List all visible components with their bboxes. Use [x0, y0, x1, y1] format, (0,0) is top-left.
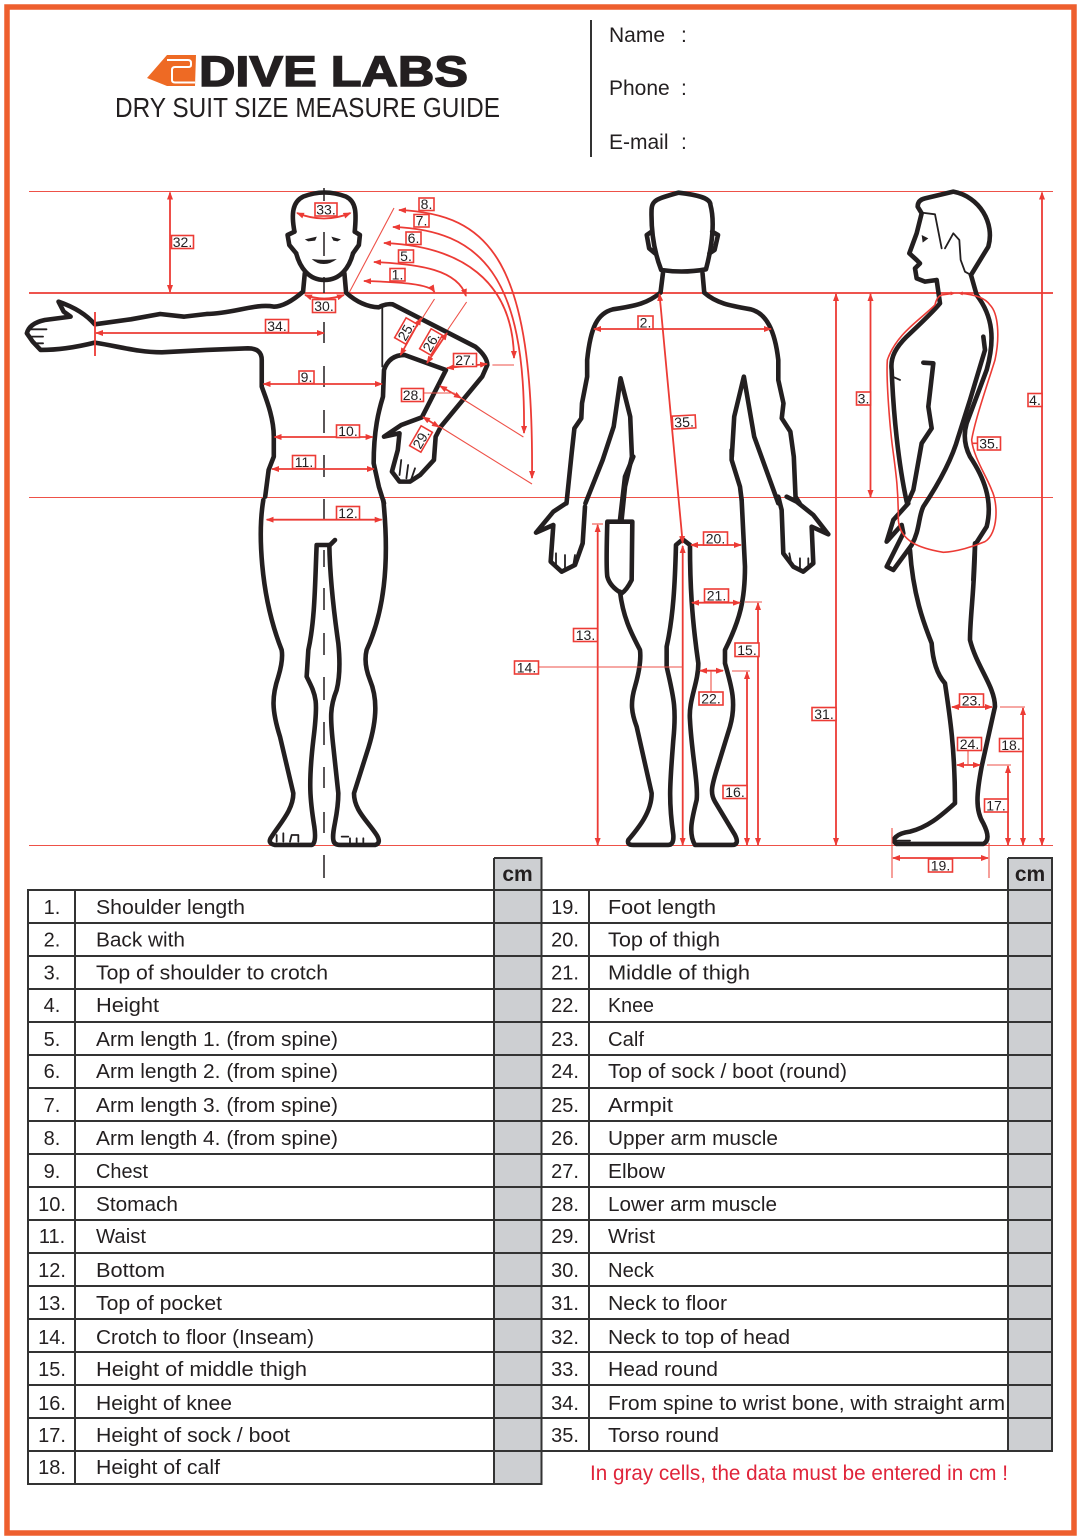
row 28: 28.	[551, 1194, 579, 1216]
table: measurements 19 to 35	[542, 858, 1052, 1451]
row 12	[38, 1260, 165, 1282]
row 23	[551, 1029, 644, 1051]
row 31: 31.	[551, 1293, 579, 1315]
row 23: Calf	[608, 1029, 644, 1051]
figure: front view	[27, 188, 487, 878]
row 11: Waist	[96, 1226, 146, 1248]
row 26: 26.	[551, 1128, 579, 1150]
face features	[305, 237, 341, 264]
row 20: Top of thigh	[608, 930, 720, 952]
field: name: :	[681, 24, 687, 47]
row 1	[44, 897, 245, 919]
row 1: Shoulder length	[96, 897, 245, 919]
row 5: 5.	[44, 1029, 60, 1051]
label 3: 3.	[858, 390, 869, 406]
row 33: 33.	[551, 1359, 579, 1381]
row 19: Foot length	[608, 897, 716, 919]
row 33	[551, 1359, 718, 1381]
row 8: Arm length 4. (from spine)	[96, 1128, 338, 1150]
label 20: 20.	[706, 530, 725, 546]
row 9	[44, 1161, 148, 1183]
label 24: 24.	[960, 736, 979, 752]
row 5: Arm length 1. (from spine)	[96, 1029, 338, 1051]
row 18: Height of calf	[96, 1457, 220, 1479]
row 35: Torso round	[608, 1425, 719, 1447]
row 21: 21.	[551, 962, 579, 984]
label 2: 2.	[640, 314, 651, 330]
row 13	[38, 1293, 222, 1315]
row 22: 22.	[551, 995, 579, 1017]
label 10: 10.	[338, 423, 358, 439]
row 11: 11.	[39, 1226, 65, 1248]
title: DRY SUIT SIZE MEASURE GUIDE	[115, 92, 500, 123]
label 32: 32.	[173, 234, 192, 250]
row 35	[551, 1425, 719, 1447]
row 1: 1.	[44, 897, 60, 919]
row 31	[551, 1293, 727, 1315]
row 8: 8.	[44, 1128, 60, 1150]
row 16: Height of knee	[96, 1393, 232, 1415]
row 32: Neck to top of head	[608, 1327, 790, 1349]
label 28: 28.	[403, 387, 422, 403]
row 22: Knee	[608, 995, 654, 1017]
row 25: Armpit	[608, 1095, 673, 1117]
row 22	[551, 995, 654, 1017]
row 19: 19.	[551, 897, 579, 919]
row 30: 30.	[551, 1260, 579, 1282]
label 14: 14.	[517, 660, 536, 676]
row 11	[39, 1226, 146, 1248]
label 31: 31.	[814, 706, 834, 722]
row 7: Arm length 3. (from spine)	[96, 1095, 338, 1117]
row 25	[551, 1095, 673, 1117]
row 21	[551, 962, 750, 984]
label 1: 1.	[392, 266, 403, 282]
row 7: 7.	[44, 1095, 60, 1117]
row 27	[551, 1161, 666, 1183]
row 27: 27.	[551, 1161, 579, 1183]
eye	[922, 235, 928, 243]
reference lines	[29, 192, 1053, 846]
header: contact fields	[591, 20, 687, 157]
row 25: 25.	[551, 1095, 579, 1117]
column header cm: cm	[1015, 863, 1045, 886]
row 30	[551, 1260, 655, 1282]
row 18: 18.	[38, 1457, 66, 1479]
row 3: Top of shoulder to crotch	[96, 962, 328, 984]
row 15: Height of middle thigh	[96, 1359, 307, 1381]
row 16	[38, 1393, 232, 1415]
row 28: Lower arm muscle	[608, 1194, 777, 1216]
row 20	[551, 930, 720, 952]
label 35 back: 35.	[674, 414, 694, 430]
label 25: 25.	[394, 319, 418, 343]
row 23: 23.	[551, 1029, 579, 1051]
figure: side view	[887, 192, 995, 844]
label 22: 22.	[701, 690, 721, 706]
row 13: Top of pocket	[96, 1293, 222, 1315]
label 9: 9.	[301, 369, 312, 385]
label 7: 7.	[416, 212, 427, 228]
row 10: 10.	[38, 1194, 66, 1216]
row 4: 4.	[44, 995, 60, 1017]
row 31: Neck to floor	[608, 1293, 727, 1315]
row 18	[38, 1457, 220, 1479]
row 20: 20.	[551, 930, 579, 952]
row 34: 34.	[551, 1393, 579, 1415]
label 17: 17.	[986, 798, 1006, 814]
label 30: 30.	[314, 298, 334, 314]
label 12: 12.	[338, 505, 358, 521]
row 2	[44, 930, 185, 952]
row 29	[551, 1226, 655, 1248]
row 4	[44, 995, 159, 1017]
label 13: 13.	[576, 627, 595, 643]
row 10	[38, 1194, 178, 1216]
logo wordmark: DIVE LABS	[199, 48, 468, 96]
row 29: 29.	[551, 1226, 579, 1248]
icon: Dive Labs orange arrow logo	[147, 55, 196, 86]
label 6: 6.	[408, 230, 419, 246]
row 6: Arm length 2. (from spine)	[96, 1061, 338, 1083]
row 15: 15.	[38, 1359, 66, 1381]
pocket	[607, 522, 632, 593]
row 9: Chest	[96, 1161, 148, 1183]
row 2: 2.	[44, 930, 60, 952]
row 13: 13.	[38, 1293, 66, 1315]
row 16: 16.	[38, 1393, 66, 1415]
row 29: Wrist	[608, 1226, 655, 1248]
row 33: Head round	[608, 1359, 718, 1381]
figure: back view	[536, 193, 828, 845]
row 30: Neck	[608, 1260, 655, 1282]
label 19: 19.	[931, 858, 950, 874]
row 17: Height of sock / boot	[96, 1425, 290, 1447]
field: name: Name	[609, 24, 665, 47]
label 4: 4.	[1029, 392, 1041, 408]
torso round outline on side view	[887, 291, 998, 552]
label 16: 16.	[725, 784, 745, 800]
row 3: 3.	[44, 962, 60, 984]
label 11: 11.	[295, 454, 313, 470]
row 4: Height	[96, 995, 159, 1017]
row 26: Upper arm muscle	[608, 1128, 778, 1150]
row 21: Middle of thigh	[608, 962, 750, 984]
field: email: E-mail	[609, 131, 669, 154]
row 35: 35.	[551, 1425, 579, 1447]
row 24: Top of sock / boot (round)	[608, 1061, 847, 1083]
row 19	[551, 897, 716, 919]
column header cm: cm	[502, 863, 533, 886]
label 26: 26.	[419, 330, 443, 354]
field: phone: Phone	[609, 77, 670, 100]
row 34: From spine to wrist bone, with straight arm	[608, 1393, 1005, 1415]
row 32: 32.	[551, 1327, 579, 1349]
label 15: 15.	[737, 642, 757, 658]
label 5: 5.	[400, 248, 412, 264]
field: phone: :	[681, 77, 687, 100]
row 12: 12.	[38, 1260, 66, 1282]
field: email: :	[681, 131, 687, 154]
row 12: Bottom	[96, 1260, 165, 1282]
label 27: 27.	[455, 352, 475, 368]
row 17: 17.	[38, 1425, 66, 1447]
measurement number labels	[172, 196, 1042, 874]
center line	[323, 188, 325, 878]
label 35 side: 35.	[979, 436, 999, 452]
label 23: 23.	[962, 692, 981, 708]
label 29: 29.	[409, 427, 433, 451]
row 24: 24.	[551, 1061, 579, 1083]
row 6: 6.	[44, 1061, 60, 1083]
note: gray cells instruction: In gray cells, the data must be entered in cm !	[590, 1462, 1008, 1485]
row 9: 9.	[44, 1161, 60, 1183]
row 14: Crotch to floor (Inseam)	[96, 1327, 314, 1349]
table: measurements 1 to 18	[28, 858, 542, 1484]
header: logo and title	[115, 48, 500, 123]
label 18: 18.	[1001, 737, 1021, 753]
label 33: 33.	[316, 202, 336, 218]
label 34: 34.	[267, 318, 287, 334]
row 10: Stomach	[96, 1194, 178, 1216]
row 14: 14.	[38, 1327, 66, 1349]
label 21: 21.	[707, 588, 726, 604]
row 2: Back with	[96, 930, 185, 952]
measurement arrows	[95, 192, 1042, 878]
label 8: 8.	[421, 196, 432, 212]
row 27: Elbow	[608, 1161, 666, 1183]
